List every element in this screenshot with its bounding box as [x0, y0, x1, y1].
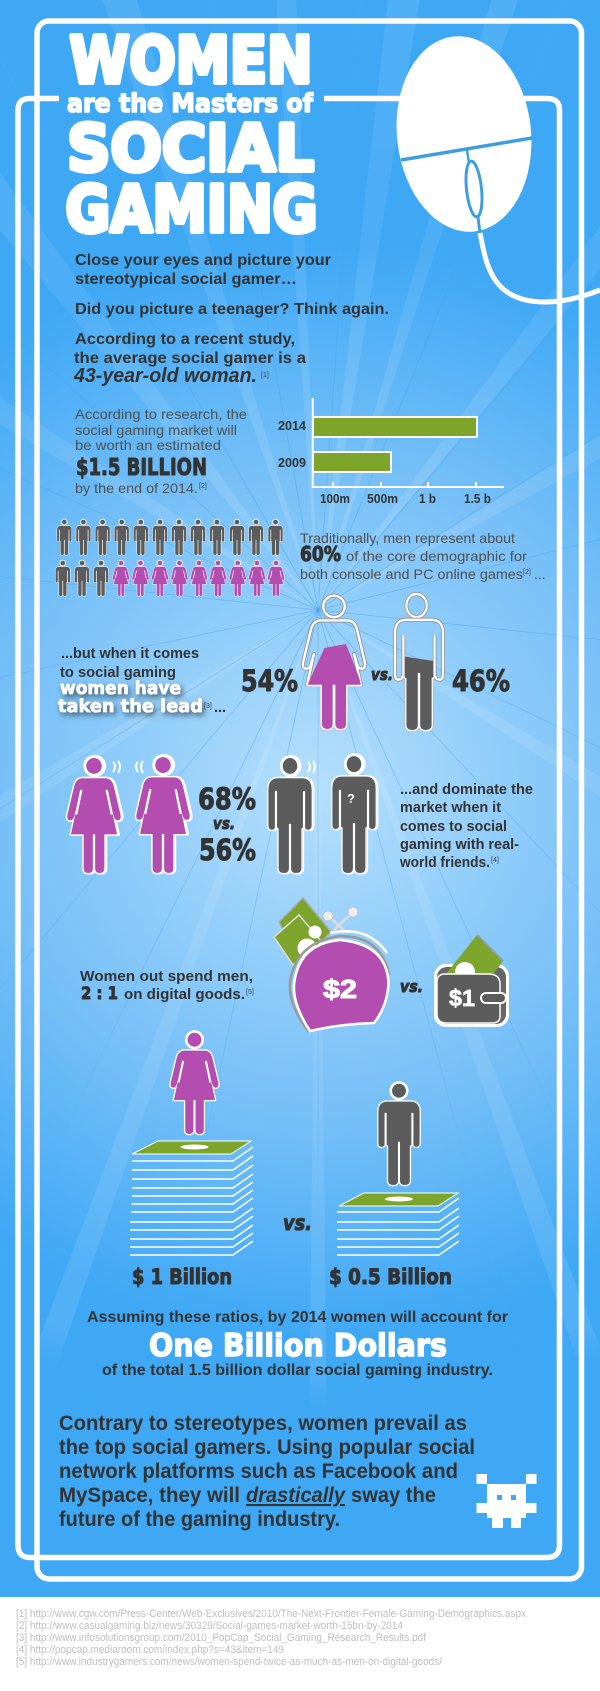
- icon: grey wallet with cash: $1: [449, 985, 475, 1011]
- closing paragraph: sway the: [351, 1484, 436, 1507]
- figure: woman outline 54 percent: [303, 596, 365, 729]
- footnote references: [1] http://www.cgw.com/Press-Center/Web-Exclusives/2010/The-Next-Frontier-Female-Gaming-Demographics.aspx: [16, 1608, 526, 1620]
- intro text: Did you picture a teenager? Think again.: [75, 301, 389, 318]
- money stack: half billion: [337, 1193, 459, 1255]
- stats: 68 percent vs 56 percent: vs.: [213, 814, 235, 833]
- figures: women talking: [67, 756, 191, 873]
- text: traditional demographic: 60%: [300, 542, 341, 566]
- figures: men talking: [268, 755, 377, 873]
- closing paragraph: MySpace, they will: [59, 1484, 240, 1507]
- conclusion text: One Billion Dollars: [149, 1328, 447, 1364]
- stats: 68 percent vs 56 percent: 68%: [198, 782, 256, 816]
- text: women have taken the lead: [58, 646, 226, 717]
- stats: 68 percent vs 56 percent: 56%: [199, 833, 256, 867]
- title: WOMEN: [70, 24, 312, 98]
- figures: men talking: ?: [347, 791, 355, 806]
- title: GAMING: [66, 174, 318, 248]
- text: traditional demographic: ...: [534, 566, 546, 582]
- text: women have taken the lead: to social gaming: [60, 665, 176, 681]
- text: real-world friends: [4]: [491, 857, 499, 864]
- text: women outspend men: [80, 969, 254, 1004]
- icon: space invader: [476, 1474, 536, 1528]
- text: women have taken the lead: taken the lead: [58, 696, 203, 717]
- closing paragraph: [59, 1412, 475, 1531]
- intro text: Close your eyes and picture your: [75, 252, 331, 269]
- text: traditional demographic: Traditionally, men represent about: [300, 530, 515, 546]
- figure: woman on 1 billion stack: [171, 1032, 218, 1134]
- intro text: According to a recent study,: [75, 331, 295, 348]
- icon: grey wallet with cash: [434, 935, 509, 1027]
- bar chart: market value: 1.5 b: [464, 492, 491, 506]
- intro text: the average social gamer is a: [74, 350, 306, 367]
- footnote references: [5] http://www.industrygamers.com/news/women-spend-twice-as-much-as-men-on-digital-goods/: [16, 1656, 443, 1668]
- stats: 68 percent vs 56 percent: [198, 782, 256, 867]
- market size text: be worth an estimated: [75, 437, 221, 453]
- market size text: by the end of 2014.: [75, 480, 198, 496]
- bar chart: market value: 1 b: [419, 492, 436, 506]
- icon: computer mouse: [387, 30, 600, 302]
- label: vs: vs.: [283, 1211, 312, 1235]
- bar chart: market value: 2014: [278, 419, 306, 433]
- title: [66, 24, 318, 248]
- text: women have taken the lead: ...: [214, 700, 226, 716]
- text: women have taken the lead: women have: [60, 678, 181, 699]
- label: 1 billion: $ 1 Billion: [132, 1265, 232, 1289]
- closing paragraph: network platforms such as Facebook and: [59, 1460, 458, 1483]
- conclusion text: of the total 1.5 billion dollar social gaming industry.: [102, 1362, 493, 1379]
- market size text: $1.5 BILLION: [76, 455, 207, 481]
- footnote references: [16, 1608, 526, 1668]
- text: women have taken the lead: [3]: [204, 703, 212, 710]
- figure: man on half billion stack: [378, 1083, 420, 1185]
- title: are the Masters of: [67, 89, 314, 119]
- text: women outspend men: 2 : 1: [81, 984, 118, 1004]
- text: real-world friends: ...and dominate the: [400, 782, 533, 798]
- closing paragraph: drastically: [246, 1484, 346, 1507]
- footnote references: [3] http://www.infosolutionsgroup.com/2010_PopCap_Social_Gaming_Research_Results.pdf: [16, 1632, 427, 1644]
- bar chart: market value: 100m: [320, 492, 350, 506]
- stat: 46 percent: 46%: [452, 664, 510, 698]
- money stack: 1 billion: [130, 1141, 253, 1255]
- icon: purple coin purse with cash: [274, 898, 389, 1032]
- conclusion text: Assuming these ratios, by 2014 women will account for: [87, 1309, 508, 1326]
- market size text: [2]: [199, 483, 207, 490]
- market size text: social gaming market will: [75, 422, 237, 438]
- bar chart: market value: 500m: [367, 492, 398, 506]
- conclusion text: [87, 1309, 508, 1379]
- icon: purple coin purse with cash: $2: [323, 974, 357, 1004]
- text: real-world friends: [399, 782, 533, 871]
- footnote references: [2] http://www.casualgaming.biz/news/30329/Social-games-market-worth-15bn-by-2014: [16, 1620, 403, 1632]
- footnote references: [4] http://popcap.mediaroom.com/index.php?s=43&item=149: [16, 1644, 284, 1656]
- intro text: [1]: [261, 372, 269, 379]
- title: SOCIAL: [67, 112, 314, 186]
- text: real-world friends: comes to social: [400, 819, 507, 835]
- text: women have taken the lead: ...but when it comes: [61, 646, 199, 662]
- text: traditional demographic: of the core demographic for: [346, 548, 527, 564]
- text: real-world friends: market when it: [400, 800, 501, 816]
- intro text: stereotypical social gamer…: [75, 271, 297, 288]
- intro text: [73, 252, 389, 387]
- closing paragraph: future of the gaming industry.: [59, 1508, 340, 1531]
- text: traditional demographic: [300, 530, 546, 582]
- bar chart: market value: 2009: [278, 456, 306, 470]
- text: women outspend men: on digital goods.: [124, 987, 245, 1003]
- closing paragraph: Contrary to stereotypes, women prevail as: [59, 1412, 467, 1435]
- inner white frame: [18, 98, 560, 1558]
- label: vs: vs.: [371, 665, 393, 684]
- market size text: According to research, the: [75, 406, 247, 422]
- text: women outspend men: [5]: [246, 989, 254, 996]
- closing paragraph: the top social gamers. Using popular social: [59, 1436, 475, 1459]
- pictogram: 60 percent men: [56, 519, 284, 596]
- market size text: [75, 406, 247, 496]
- text: real-world friends: world friends.: [399, 855, 490, 871]
- text: real-world friends: gaming with real-: [400, 837, 519, 853]
- text: traditional demographic: both console and PC online games: [300, 566, 523, 582]
- text: traditional demographic: [2]: [523, 569, 531, 576]
- label: half billion: $ 0.5 Billion: [329, 1265, 452, 1289]
- figure: man outline 46 percent: [395, 594, 443, 730]
- stat: 54 percent: 54%: [241, 664, 298, 698]
- text: women outspend men: Women out spend men,: [80, 969, 253, 985]
- label: vs: vs.: [400, 977, 423, 996]
- intro text: 43-year-old woman.: [73, 365, 257, 387]
- bar chart: market value: [278, 398, 504, 506]
